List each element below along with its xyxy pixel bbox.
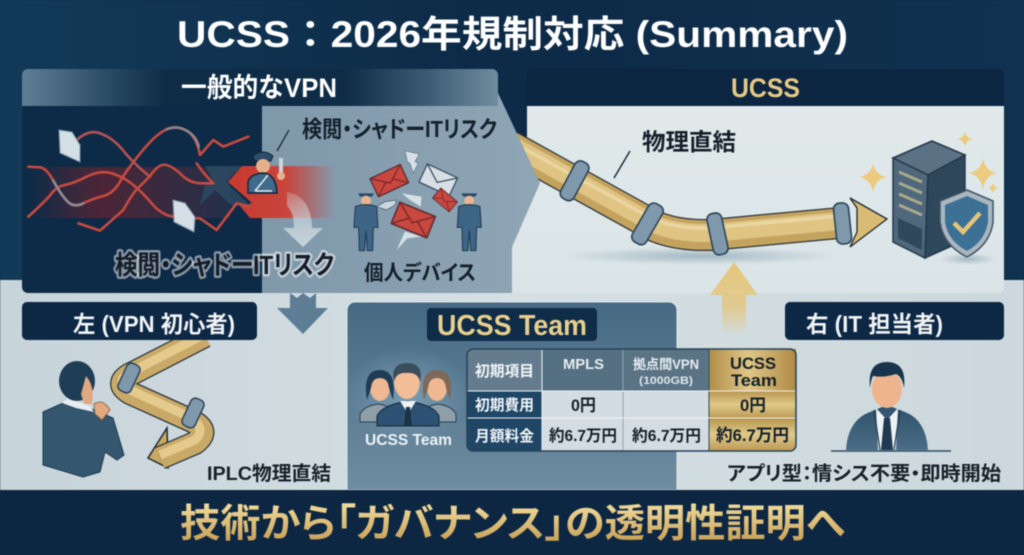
panel: general VPN [22, 69, 540, 293]
row: monthly fee: 約6.7万円 [632, 427, 701, 445]
label: UCSS Team under icon: UCSS Team [365, 432, 452, 449]
row: monthly fee [467, 418, 796, 451]
label box: left VPN beginner: 左 (VPN 初心者) [73, 311, 235, 337]
label: physical direct connection: 物理直結 [642, 129, 736, 155]
tangled red lines [28, 127, 250, 231]
callout line to officer [277, 130, 289, 151]
table header row [467, 349, 796, 391]
icon: censoring officer [248, 152, 285, 193]
icon: IT staff man [831, 362, 951, 451]
label: physical direct connection [614, 129, 736, 178]
table header row: 拠点間VPN [633, 357, 699, 372]
table header row: MPLS [563, 357, 604, 373]
curved white arrow [283, 192, 323, 247]
icon: team people [346, 347, 470, 443]
label: personal devices: 個人デバイス [364, 261, 476, 285]
row: initial cost: 0円 [740, 396, 766, 415]
UCSS Team title: UCSS Team [437, 310, 587, 342]
pipe rings [558, 159, 852, 256]
panel: UCSS Team [346, 302, 677, 490]
table header row: (1000GB) [639, 375, 693, 387]
row: monthly fee: 月額料金 [475, 427, 534, 445]
label: app type: アプリ型：情シス不要・即時開始 [727, 463, 1002, 485]
footer band [0, 490, 1024, 555]
background: light lower area [0, 280, 1024, 492]
icon: left gold pipe [116, 334, 206, 468]
VPN header band [22, 69, 498, 106]
icon: sparkles [859, 131, 998, 193]
row: monthly fee: 約6.7万円 [549, 427, 617, 445]
label box: right IT staff: 右 (IT 担当者) [806, 311, 943, 337]
panel: UCSS direct connection [510, 69, 1004, 293]
red blocked band with chevron [228, 166, 335, 218]
label: IPLC direct: IPLC物理直結 [207, 463, 331, 485]
background: dark upper area [0, 0, 1024, 290]
blocking x mark [200, 166, 250, 206]
label: censorship risk top: 検閲・シャドーITリスク [302, 116, 497, 142]
table: pricing comparison [467, 349, 796, 451]
table header row: 初期項目 [475, 363, 534, 380]
label: censorship risk bottom: 検閲・シャドーITリスク [115, 250, 334, 280]
VPN dark body [22, 106, 262, 293]
table header row: Team [731, 371, 777, 390]
row: initial cost: 初期費用 [475, 396, 534, 414]
icon: thinking man [43, 361, 124, 477]
icon: documents [59, 130, 195, 232]
arrow: gold up [710, 262, 758, 336]
table grid lines and frame [467, 349, 796, 451]
grey chevron body [262, 93, 540, 293]
VPN heading: 一般的なVPN [181, 73, 337, 103]
label box: left VPN beginner [22, 302, 257, 340]
row: initial cost [467, 391, 796, 418]
title: UCSS：2026年規制対応 (Summary) [177, 14, 848, 55]
footer headline: 技術から「ガバナンス」の透明性証明へ [180, 503, 845, 546]
icon: envelopes and officers [354, 151, 481, 251]
table header row: UCSS [730, 354, 776, 373]
label box: right IT staff [785, 302, 1004, 340]
row: initial cost: 0円 [571, 396, 596, 415]
UCSS panel body [512, 106, 1004, 293]
row: monthly fee: 約6.7万円 [716, 426, 789, 445]
dark red traffic band [30, 167, 230, 218]
icon: server with shield [893, 141, 996, 265]
arrow: down from VPN panel [277, 293, 328, 334]
gold pipe with arrow [510, 141, 887, 265]
UCSS header band [527, 69, 1004, 106]
UCSS heading: UCSS [731, 73, 800, 103]
